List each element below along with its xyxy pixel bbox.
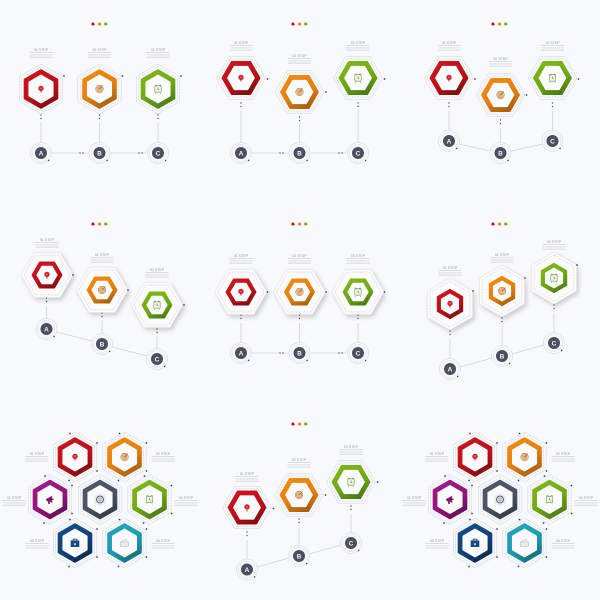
step 1 label: 01 STEP	[443, 266, 458, 270]
circle C	[542, 130, 563, 152]
legend dots	[291, 222, 308, 226]
legend dots	[91, 222, 108, 226]
circle B: B	[297, 350, 302, 357]
hexagon: green	[528, 474, 572, 524]
circle B	[289, 342, 310, 364]
circle B	[89, 142, 110, 164]
step 2 label	[288, 254, 311, 263]
circle A: A	[448, 366, 453, 373]
hexagon: green	[326, 461, 378, 503]
hexagon: orange	[503, 432, 547, 482]
hexagon: red	[21, 252, 74, 298]
legend dots	[491, 22, 508, 26]
step labels: 04 STEP	[579, 496, 594, 500]
step labels	[2, 452, 198, 548]
step 1 label	[230, 41, 252, 50]
circle C	[348, 142, 368, 164]
connector lines	[240, 314, 359, 354]
panel: center row of white flat hexagons	[215, 222, 385, 364]
step labels: 01 STEP	[430, 452, 445, 456]
legend dots	[91, 22, 108, 26]
circle C	[340, 532, 362, 554]
step 3 label	[146, 48, 170, 57]
legend dots	[291, 422, 308, 426]
step 3 label	[541, 41, 564, 50]
hexagon: red	[215, 269, 268, 315]
step 2 label	[288, 54, 311, 63]
connector lines	[40, 114, 159, 154]
circle C: C	[356, 350, 361, 357]
step 3 label	[542, 240, 566, 249]
step 1 label: 01 STEP	[240, 472, 255, 476]
step 3 label	[346, 254, 370, 263]
step labels: 02 STEP	[156, 452, 171, 456]
step 2 label	[490, 253, 514, 262]
hexagon: orange	[274, 269, 327, 315]
step 1 label: 01 STEP	[234, 254, 249, 258]
step 1 label	[438, 41, 460, 50]
step 3 label: 03 STEP	[151, 48, 166, 52]
hexagon: green	[334, 57, 385, 99]
step 2 label	[288, 458, 310, 467]
hexagon: orange	[78, 64, 123, 114]
circle A: A	[44, 326, 49, 333]
hexagon: purple	[428, 474, 473, 524]
hexagon: blue	[53, 518, 98, 568]
circle B	[288, 546, 310, 566]
step labels	[402, 452, 598, 548]
hexagon: red	[453, 432, 498, 482]
circle A	[230, 342, 252, 364]
hexagon: red	[424, 57, 476, 99]
step 1 label: 01 STEP	[442, 41, 457, 45]
step labels: 04 STEP	[179, 496, 194, 500]
hexagon: red	[216, 57, 268, 99]
circle B: B	[297, 150, 302, 157]
panel: bottom-left seven hexagon cluster	[2, 432, 198, 568]
step 2 label: 02 STEP	[95, 253, 110, 257]
step 1 label	[30, 48, 52, 57]
circle C	[148, 142, 168, 164]
step labels: 06 STEP	[156, 539, 171, 543]
hexagon: orange	[103, 432, 147, 482]
step 3 label: 03 STEP	[344, 445, 359, 449]
connector lines	[240, 102, 359, 154]
circle C: C	[349, 540, 354, 547]
circle A	[36, 318, 57, 340]
step 3 label: 03 STEP	[547, 240, 562, 244]
circle B: B	[100, 341, 105, 348]
step labels: 06 STEP	[556, 539, 571, 543]
circle C	[146, 348, 168, 370]
step 3 label	[146, 268, 168, 277]
step labels: 05 STEP	[430, 539, 445, 543]
circle C	[348, 342, 368, 364]
step 1 label	[236, 472, 258, 481]
panel: top-middle flat hexagons, middle lowered	[216, 22, 385, 164]
hexagon: slate center	[478, 474, 522, 524]
hexagon: orange	[274, 474, 326, 516]
connector lines	[46, 297, 158, 356]
circle B: B	[97, 150, 102, 157]
connector lines	[448, 102, 553, 151]
step labels: 03 STEP	[7, 496, 22, 500]
step labels: 01 STEP	[30, 452, 45, 456]
connector lines	[449, 304, 555, 367]
step 2 label	[489, 57, 512, 66]
hexagon: blue	[453, 518, 498, 568]
step 2 label: 02 STEP	[92, 48, 107, 52]
circle A	[438, 130, 460, 152]
hexagon: teal	[503, 518, 547, 568]
step 3 label: 03 STEP	[351, 41, 366, 45]
circle A: A	[447, 138, 452, 145]
hexagon: slate center	[78, 474, 122, 524]
step 1 label	[230, 254, 252, 263]
step 2 label: 02 STEP	[292, 254, 307, 258]
step 3 label	[340, 445, 362, 454]
step 3 label: 03 STEP	[545, 41, 560, 45]
circle B	[289, 142, 310, 164]
circle C: C	[550, 138, 555, 145]
circle B	[490, 142, 511, 164]
step 2 label: 02 STEP	[292, 54, 307, 58]
hexagon: red	[222, 486, 274, 529]
circle C: C	[356, 150, 361, 157]
circle C: C	[155, 356, 160, 363]
hexagon: orange	[476, 74, 527, 116]
circle C: C	[156, 150, 161, 157]
circle B	[92, 334, 112, 354]
circle C: C	[552, 340, 557, 347]
step 1 label	[36, 238, 58, 247]
panel: bottom-right seven hexagon cluster	[402, 432, 598, 568]
step labels: 03 STEP	[407, 496, 422, 500]
circle B: B	[297, 553, 302, 560]
step 2 label: 02 STEP	[495, 253, 510, 257]
legend dots	[491, 222, 508, 226]
circle A	[440, 358, 460, 380]
circle A	[230, 142, 252, 164]
circle A: A	[245, 567, 250, 574]
circle C	[544, 332, 564, 354]
circle A: A	[239, 150, 244, 157]
panel: top-left three pointy hexagons in a row	[19, 22, 182, 164]
hexagon: red	[427, 278, 474, 330]
hexagon: orange	[76, 267, 129, 313]
circle B: B	[500, 353, 505, 360]
hexagon: green	[131, 282, 185, 328]
hexagon: green	[531, 252, 578, 304]
hexagon: teal	[103, 518, 147, 568]
step 2 label	[90, 253, 114, 262]
step 1 label	[438, 266, 462, 275]
hexagon: green	[136, 64, 182, 114]
legend dots	[291, 22, 308, 26]
hexagon: green	[528, 57, 579, 99]
panel: middle-right ascending white pointy hexagons	[427, 222, 578, 380]
panel: middle-left descending white hexagons	[21, 222, 185, 370]
step 1 label: 01 STEP	[234, 41, 249, 45]
circle A: A	[39, 150, 44, 157]
step 2 label	[88, 48, 111, 57]
hexagon: red	[53, 432, 98, 482]
step 1 label: 01 STEP	[40, 238, 55, 242]
panel: bottom-middle ascending flat hexagons	[222, 422, 378, 580]
step 3 label	[346, 41, 370, 50]
circle B	[492, 346, 512, 366]
hexagon: orange	[479, 265, 526, 317]
step 2 label: 02 STEP	[292, 458, 307, 462]
hexagon: orange	[275, 71, 327, 113]
circle B: B	[498, 150, 503, 157]
hexagon: green	[128, 474, 172, 524]
circle A: A	[239, 350, 244, 357]
hexagon: green	[332, 269, 385, 315]
circle A	[30, 142, 52, 164]
step 3 label: 03 STEP	[150, 268, 165, 272]
hexagon: red	[19, 64, 65, 114]
step labels: 02 STEP	[556, 452, 571, 456]
panel: top-right flat hexagons with V connector	[424, 22, 579, 164]
step 1 label: 01 STEP	[34, 48, 49, 52]
step labels: 05 STEP	[30, 539, 45, 543]
step 3 label: 03 STEP	[351, 254, 366, 258]
hexagon: purple	[28, 474, 73, 524]
connector lines	[246, 505, 352, 567]
step 2 label: 02 STEP	[493, 57, 508, 61]
circle A	[236, 559, 258, 580]
